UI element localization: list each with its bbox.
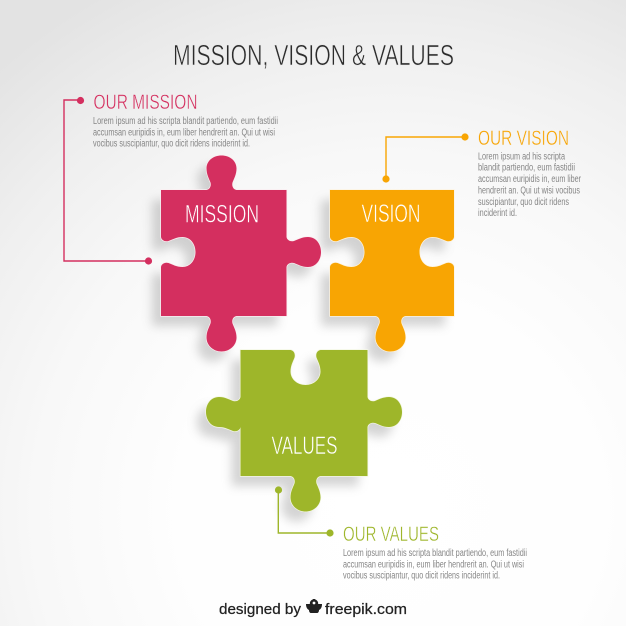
text block: values: accumsan euripidis in, eum liber hendrerit an. Qui ut wisi [343, 559, 524, 570]
text block: values: Lorem ipsum ad his scripta blandit partiendo, eum fastidii [343, 548, 527, 559]
piece label: mission: MISSION [185, 200, 259, 228]
piece shadows [152, 166, 445, 522]
piece label: vision: VISION [362, 200, 420, 228]
connector: values [275, 486, 334, 537]
panel: values [206, 350, 527, 582]
footer credit: designed by [219, 601, 301, 618]
heading: our vision: OUR VISION [478, 127, 569, 150]
text block: vision: inciderint id. [478, 208, 517, 219]
text block: vision: suscipiantur, quo dicit ridens [478, 197, 569, 208]
text block: vision: blandit partiendo, eum fastidii [478, 163, 575, 174]
panel: mission [64, 91, 321, 352]
panel: vision [330, 127, 581, 352]
text block: mission: accumsan euripidis in, eum liber hendrerit an. Qui ut wisi [93, 127, 275, 138]
text block: vision: Lorem ipsum ad his scripta [478, 151, 565, 162]
connector: mission [64, 97, 152, 265]
heading: our values: OUR VALUES [343, 523, 439, 546]
text block: mission: vocibus suscipiantur, quo dicit ridens inciderint id. [93, 139, 250, 150]
puzzle piece: vision [330, 190, 454, 352]
footer credit: freepik.com [325, 601, 407, 618]
text block: values: vocibus suscipiantur, quo dicit ridens inciderint id. [343, 571, 500, 582]
icon: freepik logo [306, 599, 322, 613]
text block: vision: hendrerit an. Qui ut wisi vocibus [478, 185, 580, 196]
puzzle piece: mission [161, 156, 321, 352]
text block: values [343, 548, 527, 582]
heading: our mission: OUR MISSION [94, 91, 198, 114]
text block: vision: accumsan euripidis in, eum liber [478, 174, 581, 185]
piece label: values: VALUES [272, 432, 338, 460]
text block: vision [478, 151, 581, 219]
connector: vision [382, 133, 469, 183]
title: MISSION, VISION & VALUES [173, 40, 454, 72]
puzzle piece: values [206, 350, 402, 512]
footer credit [219, 599, 407, 618]
text block: mission: Lorem ipsum ad his scripta blandit partiendo, eum fastidii [93, 116, 278, 127]
text block: mission [93, 116, 278, 150]
